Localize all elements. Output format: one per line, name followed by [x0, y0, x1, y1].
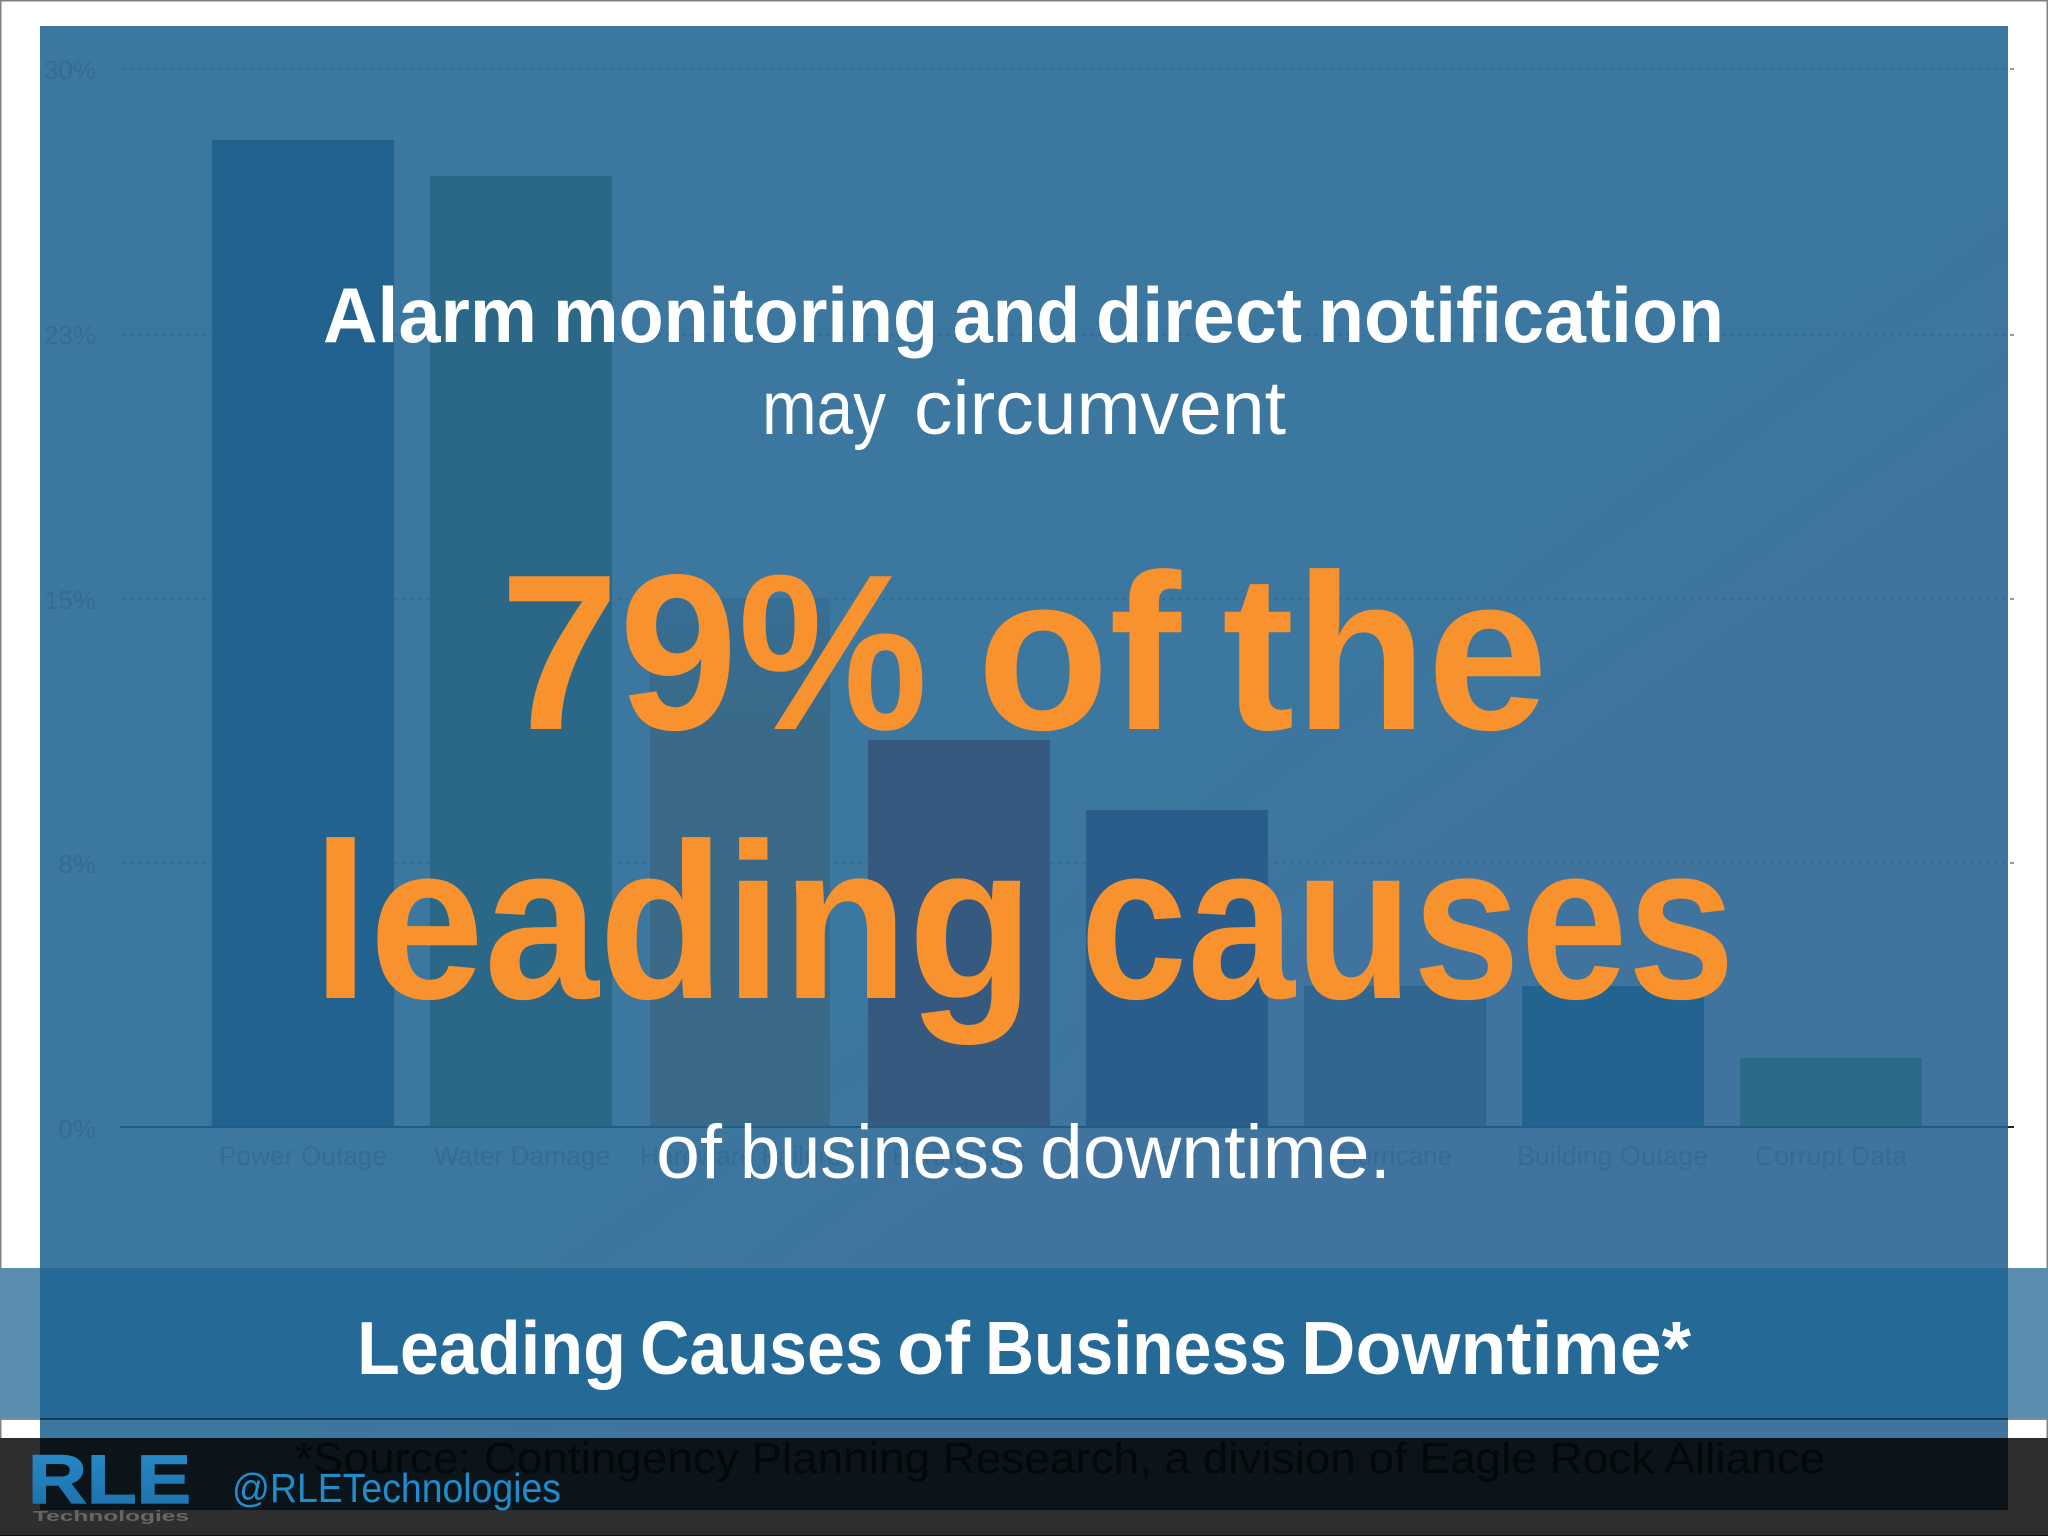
- x axis labels: Fire: [1160, 1141, 1196, 1171]
- chart title text: Leading: [357, 1306, 626, 1390]
- x axis labels: Building Outage: [1517, 1141, 1708, 1171]
- x axis labels: Hardware Failure: [640, 1141, 842, 1171]
- bar: Building Outage: [1522, 986, 1704, 1127]
- source note: *Source: Contingency Planning Research, a division of Eagle Rock Alliance: [295, 1434, 1825, 1483]
- heading: alarm monitoring: Alarm: [323, 271, 537, 359]
- y axis labels: 0%: [58, 1114, 96, 1144]
- big stat line 2: causes: [1080, 798, 1735, 1046]
- x axis labels: Earthquake: [892, 1141, 1026, 1171]
- y axis labels: [44, 55, 96, 1144]
- x axis labels: Corrupt Data: [1755, 1141, 1908, 1171]
- x axis tick: [2008, 1126, 2014, 1128]
- big stat line 1: of: [977, 529, 1182, 777]
- bar: Hurricane: [1304, 986, 1486, 1127]
- band: chart title: [0, 1268, 2048, 1420]
- y axis labels: 23%: [44, 320, 96, 350]
- chart title text: of: [897, 1306, 971, 1390]
- heading: alarm monitoring: and: [953, 271, 1080, 359]
- text: of business downtime: of: [656, 1110, 723, 1195]
- text: of business downtime: business: [740, 1110, 1025, 1195]
- bar: Water Damage: [430, 176, 612, 1127]
- x axis labels: Water Damage: [434, 1141, 610, 1171]
- y axis labels: 15%: [44, 585, 96, 615]
- heading: alarm monitoring: monitoring: [553, 271, 938, 359]
- bar chart: leading causes of downtime: [44, 55, 2014, 1171]
- bar: Hardware Failure: [650, 598, 830, 1127]
- bar: Corrupt Data: [1740, 1058, 1922, 1127]
- text: may circumvent: may: [762, 366, 886, 451]
- text: may circumvent: circumvent: [914, 366, 1286, 451]
- heading: alarm monitoring: notification: [1318, 271, 1724, 359]
- big stat line 1: the: [1222, 529, 1548, 777]
- big stat line 1: 79%: [500, 529, 928, 777]
- text: of business downtime: downtime.: [1040, 1110, 1391, 1195]
- y axis tick marks: [2010, 68, 2014, 864]
- y axis gridlines: [122, 69, 2008, 863]
- logo: RLE Technologies: RLE: [28, 1441, 191, 1518]
- footer bar: [0, 1434, 2048, 1536]
- chart title text: Causes: [640, 1306, 883, 1390]
- x axis: [120, 1126, 2008, 1128]
- logo subtitle: Technologies: [33, 1508, 189, 1525]
- y axis labels: 8%: [58, 849, 96, 879]
- x axis labels: Hurricane: [1339, 1141, 1452, 1171]
- y axis labels: 30%: [44, 55, 96, 85]
- heading: alarm monitoring: direct: [1096, 271, 1302, 359]
- bar: Fire: [1086, 810, 1268, 1127]
- x axis labels: [219, 1141, 1908, 1171]
- big stat line 2: leading: [312, 798, 1034, 1046]
- x axis labels: Power Outage: [219, 1141, 387, 1171]
- bar: Earthquake: [868, 740, 1050, 1127]
- bar: Power Outage: [212, 140, 394, 1127]
- chart title text: Downtime*: [1301, 1306, 1692, 1390]
- social handle: @RLETechnologies: [232, 1465, 561, 1511]
- chart title text: Business: [985, 1306, 1287, 1390]
